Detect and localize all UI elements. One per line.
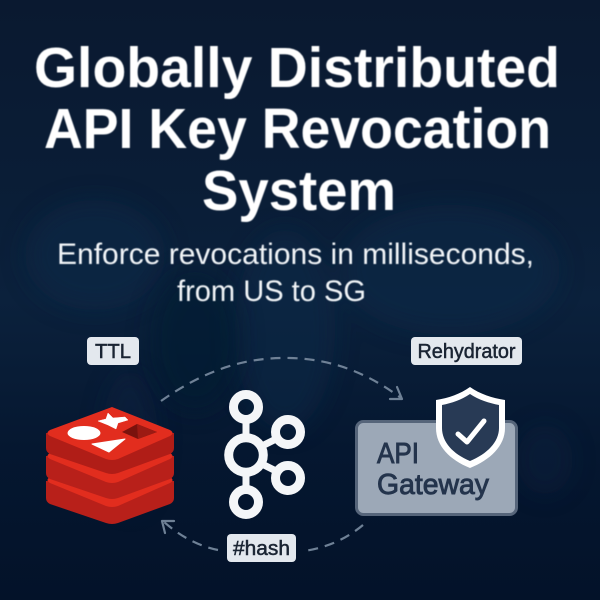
subtitle: Enforce revocations in milliseconds, bbox=[57, 238, 534, 271]
Redis bottom layer bbox=[46, 454, 174, 524]
title: System bbox=[202, 159, 396, 223]
label: TTL bbox=[87, 337, 139, 365]
gateway text: Gateway bbox=[377, 469, 489, 501]
subtitle bbox=[57, 238, 534, 308]
Redis top layer bbox=[46, 407, 174, 474]
label: TTL: TTL bbox=[95, 341, 131, 363]
world map backdrop bbox=[25, 200, 573, 510]
Redis circle bbox=[68, 426, 100, 440]
Redis middle layer bbox=[46, 430, 174, 499]
icon: Redis stack bbox=[46, 407, 174, 524]
arrow: bottom arc from gateway to Redis bbox=[162, 521, 363, 551]
Redis star bbox=[98, 413, 128, 429]
title: Globally Distributed bbox=[34, 36, 560, 100]
Redis dark square bbox=[122, 424, 157, 439]
gateway text bbox=[377, 438, 489, 501]
title: API Key Revocation bbox=[44, 97, 551, 161]
icon: Kafka nodes bbox=[229, 394, 300, 514]
gateway text: API bbox=[377, 438, 419, 470]
dark patch beside the map bbox=[150, 270, 240, 410]
label: Rehydrator: Rehydrator bbox=[418, 341, 516, 363]
label: #hash: #hash bbox=[233, 538, 290, 560]
arrow: top arc from Redis to gateway bbox=[161, 358, 402, 401]
icon: shield with check bbox=[436, 387, 505, 468]
panel: API Gateway bbox=[356, 422, 516, 514]
title bbox=[34, 36, 560, 223]
label: #hash bbox=[227, 534, 296, 562]
Redis triangle bbox=[92, 439, 125, 452]
subtitle: from US to SG bbox=[177, 275, 366, 308]
